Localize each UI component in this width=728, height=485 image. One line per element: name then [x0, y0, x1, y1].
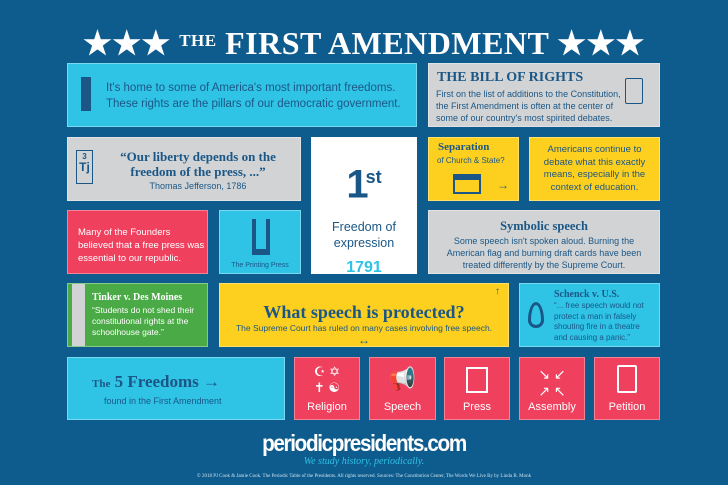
- panel: debate: debate what this exactly: [544, 156, 645, 168]
- heading: 1st: 1st: [346, 162, 382, 206]
- quote: freedom of the press, ...”: [130, 164, 266, 179]
- text: [436, 89, 621, 123]
- side stripe: [72, 284, 85, 346]
- freedom: speech: 📢: [389, 366, 416, 391]
- panel: debate: context of education.: [551, 182, 638, 192]
- quote: constitutional rights at the: [92, 316, 188, 326]
- attribution: Thomas Jefferson, 1786: [150, 181, 246, 191]
- text: treated differently by the Supreme Court.: [463, 260, 625, 270]
- text: American flag and burning draft cards have been: [447, 248, 641, 258]
- panel: printing press: [219, 210, 301, 274]
- panel: founders: [67, 210, 208, 274]
- panel: pillars: [67, 63, 417, 127]
- caption: The Printing Press: [231, 262, 289, 269]
- panel: what speech is protected: [219, 283, 509, 347]
- freedom: assembly: Assembly: [528, 401, 576, 413]
- quote: protect a man in falsely: [554, 312, 636, 320]
- freedom: religion: ✝ ☯: [314, 380, 340, 395]
- panel: tinker: [67, 283, 208, 347]
- freedom: religion: ☪ ✡: [314, 364, 340, 379]
- text: expression: [334, 236, 394, 250]
- heading: What speech is protected?: [263, 302, 465, 322]
- quote: “Students do not shed their: [92, 305, 194, 315]
- heading: The 5 Freedoms →: [92, 372, 220, 391]
- freedom: assembly: ↘ ↙: [538, 366, 566, 382]
- arrow: up: ↑: [495, 286, 500, 297]
- icon: building: [453, 174, 481, 194]
- footer: copyright: © 2018 PJ Cook & Jamie Cook. The Periodic Table of the Presidents. All rights reserved. Sources: The Constitution Center, The Words We Live By by Linda R. Monk: [197, 474, 531, 479]
- icon: Tj tile: [76, 150, 93, 184]
- quote: [120, 149, 276, 179]
- quote: schoolhouse gate.”: [92, 327, 164, 337]
- freedom: petition: [594, 357, 660, 420]
- panel: founders: essential to our republic.: [78, 253, 181, 264]
- panel: debate: [529, 137, 660, 201]
- text: pillars: [106, 82, 401, 110]
- year: 1791: [346, 259, 382, 276]
- text: Freedom of: [332, 220, 396, 234]
- icon: Tj tile: 3: [82, 152, 87, 161]
- text: [446, 236, 641, 270]
- text: pillars: These rights are the pillars of our democratic government.: [106, 98, 401, 110]
- panel: separation: [428, 137, 519, 201]
- text: The Supreme Court has ruled on many cases involving free speech.: [236, 323, 492, 333]
- quote: [554, 301, 644, 342]
- text: First on the list of additions to the Constitution,: [436, 89, 621, 99]
- title: ★★★ THE FIRST AMENDMENT ★★★: [83, 25, 645, 61]
- text: Some speech isn't spoken aloud. Burning the: [454, 236, 634, 246]
- freedom: press: Press: [463, 401, 491, 413]
- freedom: press: [444, 357, 510, 420]
- freedom: religion: [294, 357, 360, 420]
- footer: site: periodicpresidents.com: [262, 430, 466, 456]
- panel: founders: believed that a free press was: [78, 240, 204, 251]
- arrow: ↔: [358, 333, 370, 347]
- icon: Tj tile: Tj: [79, 160, 90, 174]
- text: the First Amendment is often at the center of: [436, 101, 613, 111]
- quote: [92, 305, 194, 337]
- quote: and causing a panic.”: [554, 332, 630, 342]
- text: pillars: It's home to some of America's most important freedoms.: [106, 82, 395, 94]
- freedom: assembly: ↗ ↖: [538, 383, 566, 399]
- panel: debate: means, especially in the: [544, 169, 645, 180]
- panel: founders: Many of the Founders: [78, 227, 170, 238]
- sub: of Church & State?: [437, 156, 505, 165]
- icon: column: [81, 77, 91, 111]
- text: [332, 220, 396, 250]
- icon: press: [252, 219, 270, 255]
- footer: tagline: We study history, periodically.: [304, 456, 424, 467]
- heading: THE BILL OF RIGHTS: [437, 70, 583, 85]
- freedom: petition: Petition: [609, 401, 645, 413]
- freedom: speech: Speech: [384, 401, 421, 413]
- heading: Symbolic speech: [500, 219, 588, 233]
- panel: jefferson quote: [67, 137, 301, 201]
- freedom: religion: Religion: [307, 401, 347, 413]
- freedom: assembly: [519, 357, 585, 420]
- panel: symbolic speech: [428, 210, 660, 274]
- text: some of our country's most spirited debates.: [436, 113, 612, 123]
- panel: 1st freedom of expression: [311, 137, 417, 274]
- heading: Schenck v. U.S.: [554, 289, 619, 300]
- quote: “... free speech would not: [554, 301, 644, 310]
- panel: 5 freedoms: [67, 357, 285, 420]
- panel: schenck: [519, 283, 660, 347]
- icon: scroll: [625, 78, 643, 104]
- quote: “Our liberty depends on the: [120, 149, 276, 164]
- sub: found in the First Amendment: [104, 396, 222, 406]
- heading: Tinker v. Des Moines: [92, 292, 182, 303]
- freedom: speech: [369, 357, 436, 420]
- arrow: →: [497, 178, 509, 192]
- heading: Separation: [438, 141, 489, 153]
- icon: flame: [528, 302, 544, 328]
- panel: debate: Americans continue to: [548, 144, 642, 155]
- panel: bill of rights: [428, 63, 660, 127]
- quote: shouting fire in a theatre: [554, 322, 640, 331]
